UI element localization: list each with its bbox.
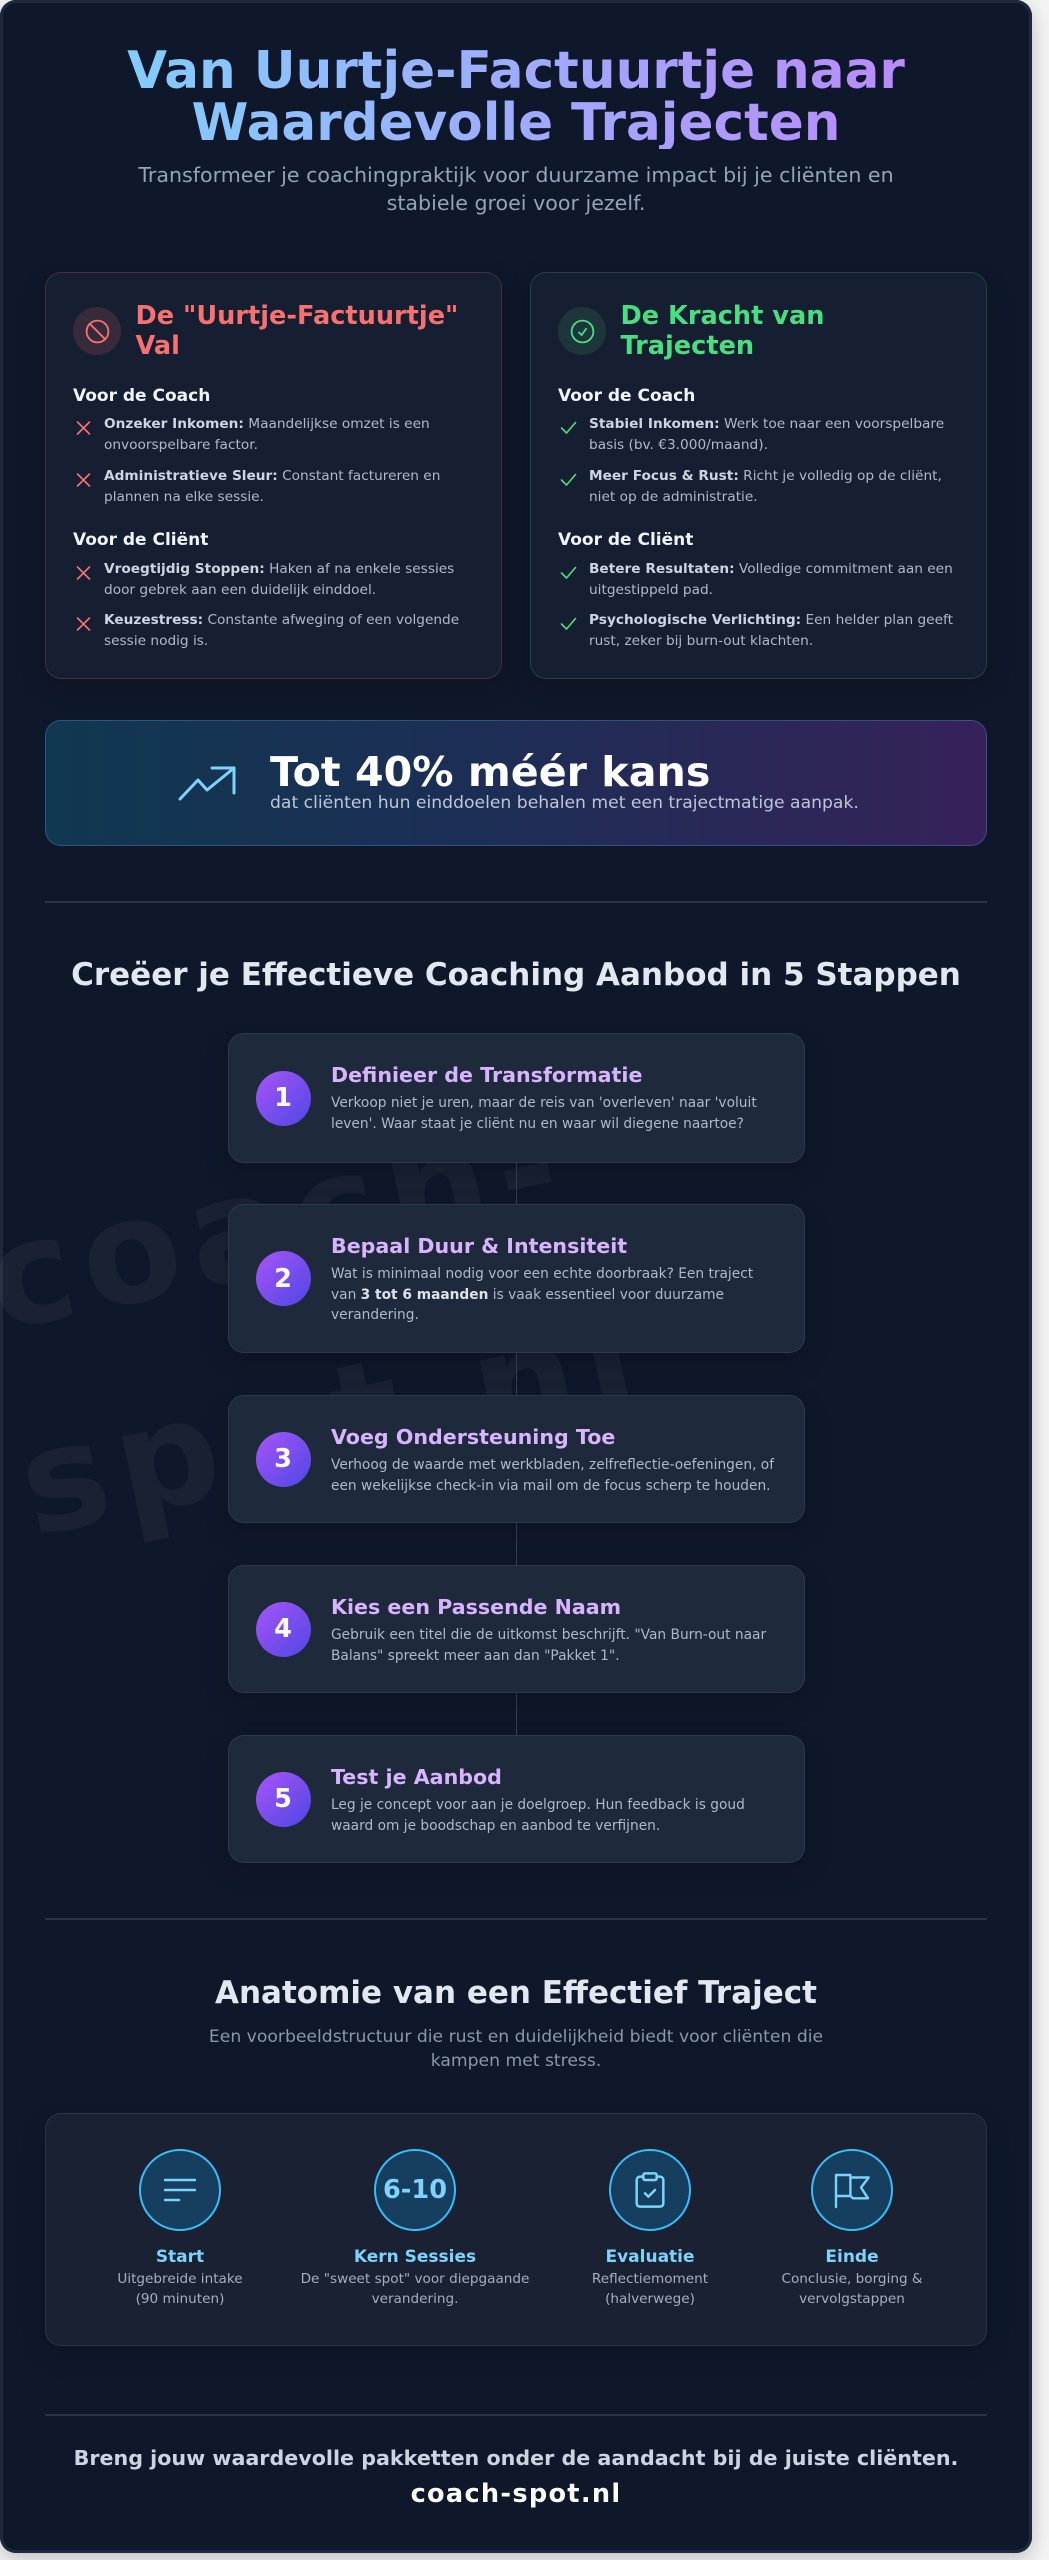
stage description	[301, 2271, 529, 2307]
stat headline: Tot 40% méér kans	[270, 748, 710, 796]
list item: betere resultaten: uitgestippeld pad.	[589, 582, 713, 598]
list item: meer focus en rust: Meer Focus & Rust: Richt je volledig op de cliënt,	[589, 468, 942, 484]
stat description: dat cliënten hun einddoelen behalen met een trajectmatige aanpak.	[270, 793, 859, 813]
title: Waardevolle Trajecten	[192, 93, 840, 153]
stage description: verandering.	[372, 2291, 458, 2307]
list item: psychologische verlichting: Psychologische Verlichting: Een helder plan geeft	[589, 612, 953, 628]
list item: meer focus en rust: niet op de administratie.	[589, 489, 758, 505]
list item: stabiel inkomen	[560, 416, 944, 453]
list item: vroegtijdig stoppen	[76, 561, 454, 598]
step number	[256, 1251, 310, 1306]
step description	[331, 1457, 774, 1494]
list item: betere resultaten	[560, 561, 953, 598]
sessions count: 6-10	[383, 2175, 447, 2205]
list item: stabiel inkomen: basis (bv. €3.000/maand).	[589, 437, 768, 453]
icon: clipboard check	[609, 2149, 691, 2231]
list item: keuzestress: sessie nodig is.	[104, 633, 208, 649]
stage label: Start	[156, 2247, 204, 2267]
step description: Balans" spreekt meer aan dan "Pakket 1".	[331, 1648, 620, 1664]
step number	[256, 1070, 310, 1126]
stage label: Evaluatie	[605, 2247, 695, 2267]
stage: evaluatie	[592, 2149, 708, 2307]
list item: onzeker inkomen	[76, 416, 430, 453]
step description	[331, 1797, 745, 1834]
stage description: Reflectiemoment	[592, 2271, 708, 2287]
list item: onzeker inkomen: Onzeker Inkomen: Maandelijkse omzet is een	[104, 416, 430, 432]
step 2 card	[228, 1204, 804, 1353]
step description: leven'. Waar staat je cliënt nu en waar wil diegene naartoe?	[331, 1116, 744, 1132]
watermark	[0, 1077, 659, 1569]
list item: stabiel inkomen: Stabiel Inkomen: Werk toe naar een voorspelbare	[589, 416, 944, 432]
list item: meer focus en rust	[560, 468, 942, 505]
stat banner	[45, 720, 987, 846]
panel heading	[620, 300, 824, 361]
stage description	[781, 2271, 923, 2307]
step description: Verkoop niet je uren, maar de reis van 'overleven' naar 'voluit	[331, 1095, 757, 1111]
list item: psychologische verlichting: rust, zeker bij burn-out klachten.	[589, 633, 813, 649]
icon: trending up arrow	[178, 766, 236, 801]
step description: Wat is minimaal nodig voor een echte doorbraak? Een traject	[331, 1266, 753, 1282]
connector line	[516, 1100, 517, 1800]
step number: 3	[274, 1444, 292, 1474]
subtitle: Transformeer je coachingpraktijk voor duurzame impact bij je cliënten en	[138, 163, 894, 187]
list item: betere resultaten: Betere Resultaten: Volledige commitment aan een	[589, 561, 953, 577]
step number	[256, 1772, 310, 1826]
step description: een wekelijkse check-in via mail om de focus scherp te houden.	[331, 1478, 771, 1494]
step title: Definieer de Transformatie	[331, 1063, 642, 1087]
stage description: Uitgebreide intake	[117, 2271, 243, 2287]
step description	[331, 1095, 757, 1132]
title	[45, 46, 987, 149]
step description: Verhoog de waarde met werkbladen, zelfreflectie-oefeningen, of	[331, 1457, 774, 1473]
panel: kracht van trajecten	[530, 272, 987, 679]
subtitle	[138, 163, 894, 215]
icon: flag	[811, 2149, 893, 2231]
step title: Voeg Ondersteuning Toe	[331, 1425, 615, 1449]
stage: einde	[781, 2149, 923, 2307]
icon: lines	[139, 2149, 221, 2231]
sessions count	[374, 2149, 456, 2231]
stage description: De "sweet spot" voor diepgaande	[301, 2271, 529, 2287]
section intro: kampen met stress.	[431, 2051, 601, 2071]
list item: onzeker inkomen: onvoorspelbare factor.	[104, 437, 258, 453]
step number: 5	[274, 1784, 292, 1814]
list item: keuzestress: Keuzestress: Constante afweging of een volgende	[104, 612, 459, 628]
panel: trajectory timeline	[45, 2113, 987, 2346]
step number: 4	[274, 1614, 292, 1644]
step description: Gebruik een titel die de uitkomst beschrijft. "Van Burn-out naar	[331, 1627, 766, 1643]
step description: waard om je boodschap en aanbod te verfijnen.	[331, 1818, 660, 1834]
footer call to action: Breng jouw waardevolle pakketten onder de aandacht bij de juiste cliënten.	[74, 2446, 958, 2470]
stage label: Kern Sessies	[354, 2247, 476, 2267]
panel heading	[136, 300, 458, 361]
step 5 card	[228, 1735, 804, 1863]
panel heading: Val	[136, 331, 180, 361]
list item: administratieve sleur	[76, 468, 440, 505]
step 3 card	[228, 1395, 804, 1523]
panel heading: De "Uurtje-Factuurtje"	[136, 300, 458, 330]
watermark: spot.nl	[5, 1273, 659, 1569]
step title: Test je Aanbod	[331, 1765, 502, 1789]
stage description: Conclusie, borging &	[781, 2271, 923, 2287]
step description: Leg je concept voor aan je doelgroep. Hun feedback is goud	[331, 1797, 745, 1813]
stage description	[592, 2271, 708, 2307]
section intro	[209, 2027, 823, 2071]
section heading: five steps: Creëer je Effectieve Coaching Aanbod in 5 Stappen	[71, 957, 961, 993]
step 1 card	[228, 1033, 804, 1163]
stage description	[117, 2271, 243, 2307]
panel: uurtje-factuurtje val	[45, 272, 502, 679]
subheading: coach: Voor de Coach	[558, 386, 695, 406]
stage description: (halverwege)	[605, 2291, 695, 2307]
subheading: coach: Voor de Coach	[73, 386, 210, 406]
step description	[331, 1266, 753, 1323]
icon: check circle	[558, 307, 606, 355]
stage: kern sessies	[301, 2149, 529, 2307]
list item: vroegtijdig stoppen: door gebrek aan een duidelijk einddoel.	[104, 582, 376, 598]
section heading: anatomy: Anatomie van een Effectief Traject	[215, 1975, 817, 2011]
title: Van Uurtje-Factuurtje naar	[127, 41, 905, 101]
stage label: Einde	[825, 2247, 879, 2267]
step title: Bepaal Duur & Intensiteit	[331, 1234, 627, 1258]
step 4 card	[228, 1565, 804, 1693]
step description: van 3 tot 6 maanden is vaak essentieel voor duurzame	[331, 1286, 724, 1302]
stage description: (90 minuten)	[136, 2291, 224, 2307]
step number	[256, 1432, 310, 1486]
stage: start	[117, 2149, 243, 2307]
list item: administratieve sleur: Administratieve Sleur: Constant factureren en	[104, 468, 440, 484]
step title: Kies een Passende Naam	[331, 1595, 621, 1619]
list item: administratieve sleur: plannen na elke sessie.	[104, 489, 264, 505]
subheading: client: Voor de Cliënt	[558, 530, 693, 550]
step description	[331, 1627, 766, 1664]
subtitle: stabiele groei voor jezelf.	[387, 191, 645, 215]
step number: 2	[274, 1264, 292, 1294]
list item: psychologische verlichting	[560, 612, 953, 649]
panel heading: De Kracht van	[620, 300, 824, 330]
stage description: vervolgstappen	[799, 2291, 905, 2307]
list item: keuzestress	[76, 612, 459, 649]
panel heading: Trajecten	[620, 331, 754, 361]
step number	[256, 1602, 310, 1656]
step number: 1	[274, 1083, 292, 1113]
list item: vroegtijdig stoppen: Vroegtijdig Stoppen: Haken af na enkele sessies	[104, 561, 454, 577]
icon: prohibited	[73, 307, 121, 355]
step description: verandering.	[331, 1307, 419, 1323]
section intro: Een voorbeeldstructuur die rust en duidelijkheid biedt voor cliënten die	[209, 2027, 823, 2047]
subheading: client: Voor de Cliënt	[73, 530, 208, 550]
footer url: coach-spot.nl	[411, 2479, 621, 2509]
